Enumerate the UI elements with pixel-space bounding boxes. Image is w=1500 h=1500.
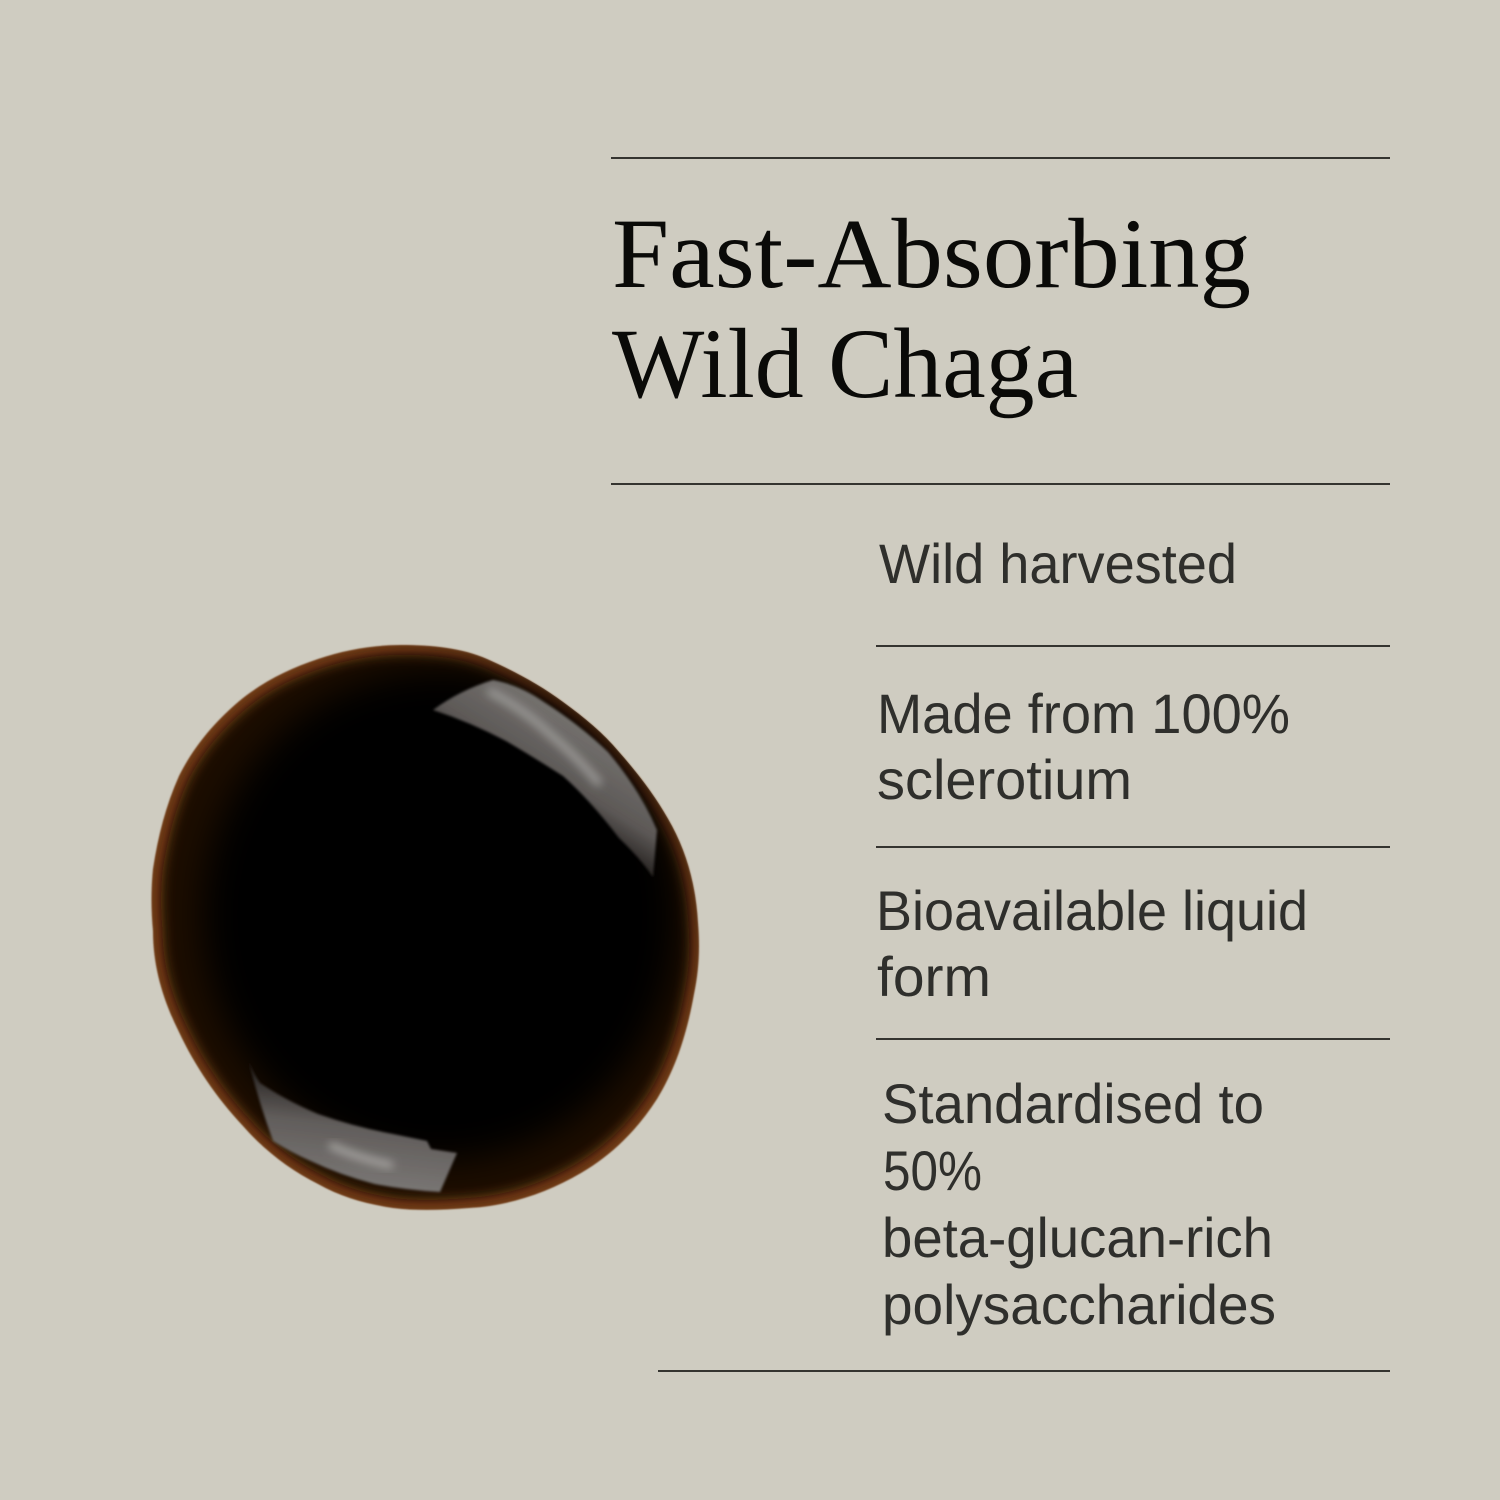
infographic canvas xyxy=(150,157,1390,1372)
glossy highlight: upper right xyxy=(433,680,657,877)
feature: standardised to 50% polysaccharides xyxy=(882,1072,1276,1336)
feature: standardised to 50% polysaccharides: 50% xyxy=(883,1139,982,1202)
feature list xyxy=(658,532,1390,1372)
title xyxy=(612,198,1251,419)
feature: made from 100% sclerotium: sclerotium xyxy=(877,748,1132,811)
feature: made from 100% sclerotium: Made from 100% xyxy=(877,682,1290,745)
image: dark chaga liquid droplet xyxy=(152,645,699,1210)
title: Fast-Absorbing xyxy=(612,198,1251,309)
title: Wild Chaga xyxy=(612,308,1078,419)
feature: bioavailable liquid form: Bioavailable liquid xyxy=(876,879,1308,942)
feature: standardised to 50% polysaccharides: polysaccharides xyxy=(882,1273,1276,1336)
droplet amber rim xyxy=(152,645,699,1210)
feature: bioavailable liquid form xyxy=(876,879,1308,1008)
feature: standardised to 50% polysaccharides: beta-glucan-rich xyxy=(882,1206,1273,1269)
droplet dark body xyxy=(161,655,689,1200)
feature: wild harvested: Wild harvested xyxy=(879,532,1237,595)
feature: standardised to 50% polysaccharides: Standardised to xyxy=(882,1072,1264,1135)
glossy highlight: lower left xyxy=(248,1060,457,1192)
feature: bioavailable liquid form: form xyxy=(877,945,991,1008)
feature: made from 100% sclerotium xyxy=(877,682,1290,811)
